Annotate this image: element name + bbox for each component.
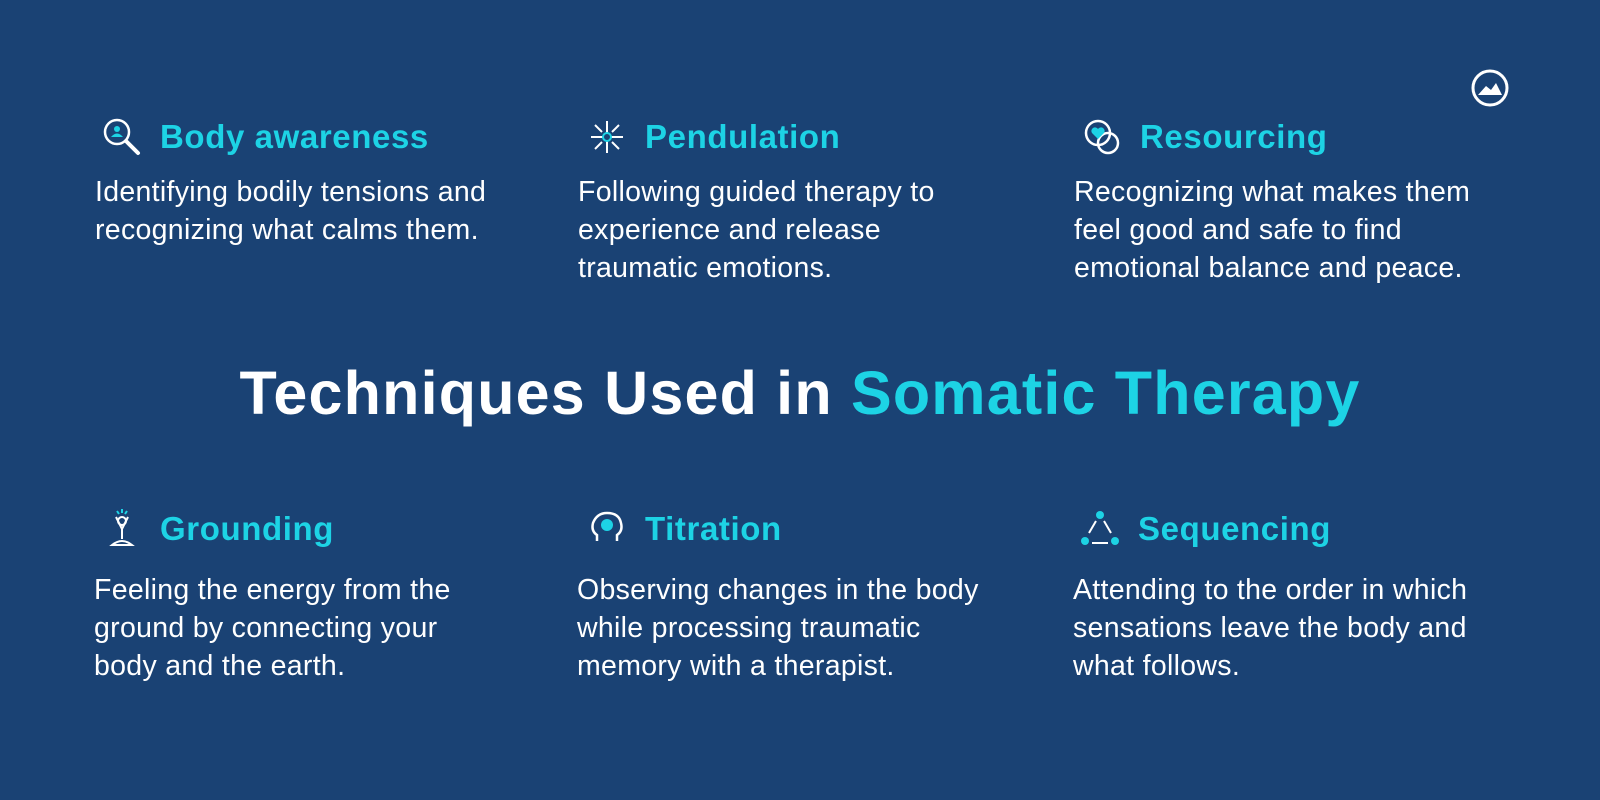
logo [1472, 70, 1508, 106]
heading: Pendulation: Pendulation [645, 118, 840, 155]
heading: Titration: Titration [645, 510, 782, 547]
heading: Resourcing: Resourcing [1140, 118, 1328, 155]
text: ground by connecting your [94, 612, 437, 644]
heading: Grounding: Grounding [160, 510, 334, 547]
item: Pendulation [578, 118, 935, 284]
text [1073, 574, 1467, 682]
text [1074, 176, 1470, 284]
text: Feeling the energy from the [94, 574, 451, 606]
text: feel good and safe to find [1074, 214, 1402, 246]
item: Grounding [94, 509, 451, 682]
text [94, 574, 451, 682]
text: Following guided therapy to [578, 176, 935, 208]
text: while processing traumatic [577, 612, 921, 644]
text: what follows. [1073, 650, 1240, 682]
text: sensations leave the body and [1073, 612, 1467, 644]
item: Titration [577, 510, 979, 682]
text: memory with a therapist. [577, 650, 895, 682]
item: Resourcing [1074, 118, 1470, 284]
text: Identifying bodily tensions and [95, 176, 486, 208]
text: traumatic emotions. [578, 252, 832, 284]
text: experience and release [578, 214, 881, 246]
text [95, 176, 486, 246]
text: Attending to the order in which [1073, 574, 1467, 606]
heading: Sequencing: Sequencing [1138, 510, 1331, 547]
title: Techniques Used in Somatic Therapy [240, 359, 1360, 427]
item: Sequencing [1073, 510, 1467, 682]
text [577, 574, 979, 682]
text: Observing changes in the body [577, 574, 979, 606]
text: recognizing what calms them. [95, 214, 479, 246]
text: body and the earth. [94, 650, 345, 682]
text: emotional balance and peace. [1074, 252, 1463, 284]
item: Body awareness [95, 118, 486, 246]
text [578, 176, 935, 284]
text: Recognizing what makes them [1074, 176, 1470, 208]
heading: Body awareness: Body awareness [160, 118, 429, 155]
